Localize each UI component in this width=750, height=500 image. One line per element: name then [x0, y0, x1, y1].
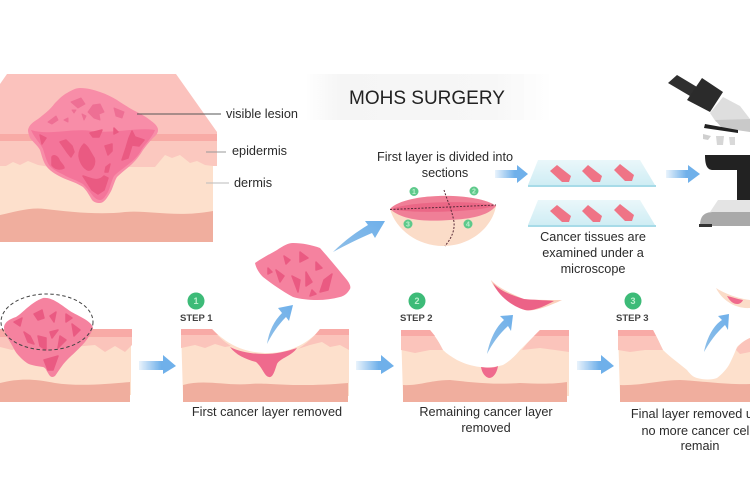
section number badges [404, 186, 478, 228]
icon: sectioned tissue [390, 186, 496, 246]
step 1 badge: 1 [193, 296, 199, 306]
title: MOHS SURGERY [349, 88, 505, 109]
step 2 badge: 2 [414, 296, 420, 306]
panel: initial skin with marked lesion [0, 298, 132, 402]
step 3 label: STEP 3 [616, 313, 649, 324]
section number badges: 2 [472, 188, 476, 196]
step 2 badge [408, 292, 426, 310]
panel: large skin cross-section with visible lesion [0, 74, 217, 242]
removed layer 3 [716, 288, 750, 308]
arrow: to step 1 [139, 355, 176, 374]
arrow: slides to microscope [666, 165, 700, 183]
caption: first layer divided: First layer is divided into [377, 150, 513, 164]
caption: tissues examined: Cancer tissues are [540, 230, 646, 244]
caption: step 2: removed [461, 421, 511, 435]
icon: lower slide with tissue [528, 200, 656, 227]
caption: first layer divided: sections [422, 166, 468, 180]
removed lesion piece [255, 243, 350, 300]
leader line: epidermis [206, 151, 226, 153]
leader line: dermis [206, 182, 229, 184]
caption: step 2: Remaining cancer layer [419, 405, 553, 419]
arrow: to step 2 [356, 355, 394, 374]
arrow: sections to slides [495, 165, 528, 183]
caption: tissues examined: examined under a [542, 246, 645, 260]
panel: step 1 skin [181, 329, 349, 402]
arrow: step 2 upward [487, 315, 513, 354]
leader line: visible lesion [137, 113, 221, 115]
section number badges: 3 [406, 222, 410, 228]
label: dermis: dermis [234, 176, 272, 190]
icon: upper slide with tissue [528, 160, 656, 187]
caption: tissues examined: microscope [561, 262, 625, 276]
lesion spots [40, 98, 144, 194]
step 3 badge [624, 292, 642, 310]
panel: step 2 skin [401, 330, 569, 402]
dashed selection ellipse [1, 294, 93, 350]
section number badges: 4 [466, 222, 470, 228]
label: visible lesion: visible lesion [226, 107, 298, 121]
arrow: lesion to sections [333, 221, 385, 252]
step 3 badge: 3 [630, 296, 636, 306]
panel: step 3 skin [618, 330, 750, 402]
section number badges: 1 [412, 189, 416, 196]
caption: step 1: First cancer layer removed [192, 405, 342, 419]
arrow: to step 3 [577, 355, 614, 374]
title backdrop [305, 74, 555, 120]
removed layer 2 [491, 280, 562, 310]
step 1 badge [188, 292, 204, 310]
step 2 label: STEP 2 [400, 313, 433, 324]
step 1 label: STEP 1 [180, 313, 213, 324]
label: epidermis: epidermis [232, 144, 287, 158]
arrow: step 1 upward [267, 305, 293, 344]
icon: microscope [668, 75, 750, 227]
arrow: step 3 upward [704, 314, 729, 352]
lesion [4, 298, 93, 377]
lesion [28, 88, 158, 203]
caption: step 3: remain [681, 439, 719, 453]
